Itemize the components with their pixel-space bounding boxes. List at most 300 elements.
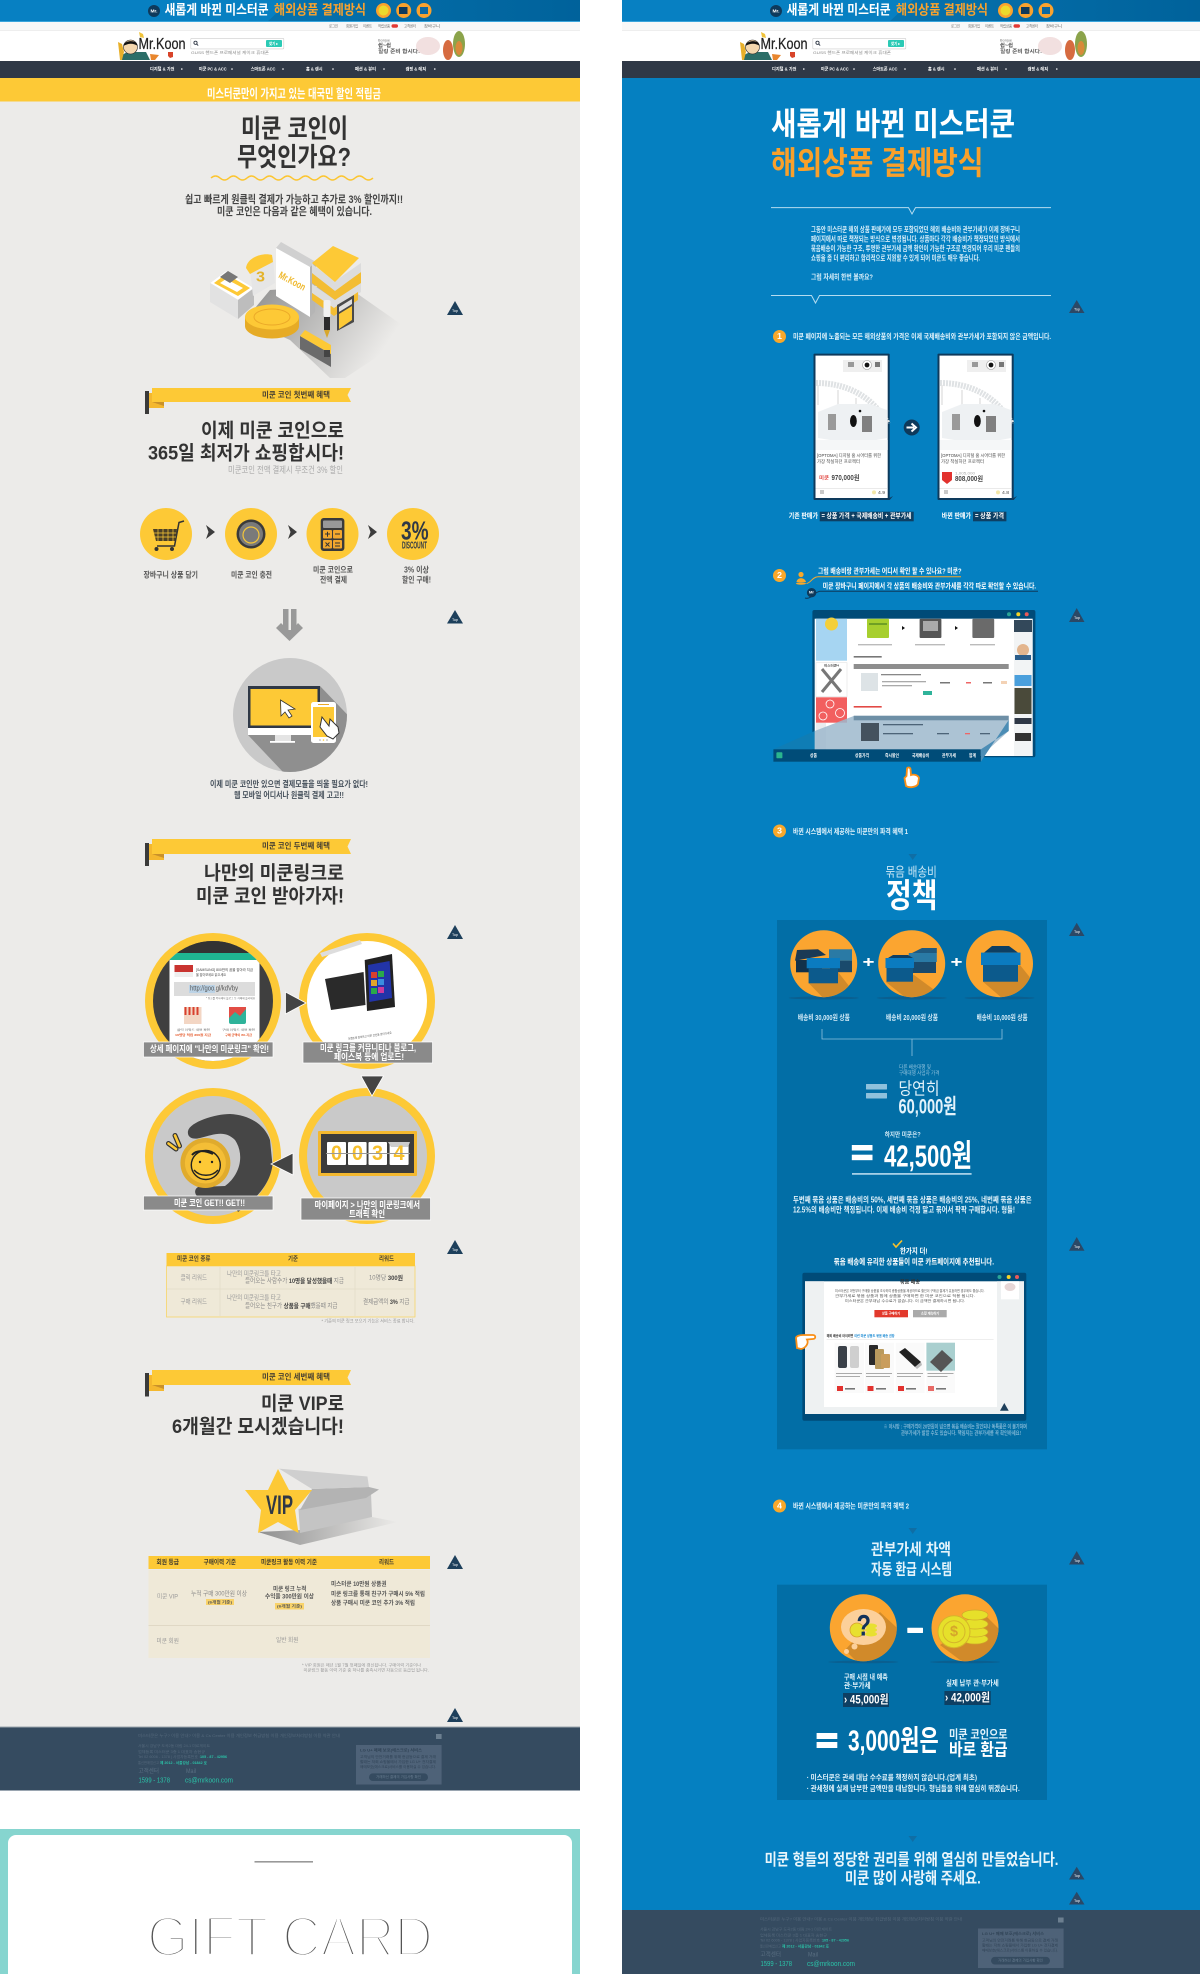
site header (left): 적립상품 xyxy=(378,22,390,28)
icon: top button xyxy=(447,610,463,624)
site header (right): 디지털 & 가전 xyxy=(772,66,796,72)
icon: top button: Top xyxy=(1074,1245,1080,1249)
comparison: other services 60,000 won: 60,000원 xyxy=(898,1096,957,1118)
site header (right): 적립상품 xyxy=(1000,22,1012,28)
icon: top button: Top xyxy=(452,309,458,313)
step 2 Q and A: 2 xyxy=(777,571,783,580)
site header (right): Bonjue xyxy=(1000,38,1012,42)
step circle: check my link: 10명당 적립 300원 지급 xyxy=(175,1033,212,1037)
step circle: check my link: 구매 리워드 내용 확인 xyxy=(222,1028,256,1032)
site header (right): GUSS 핸드폰 프로페셔널 케이크 휴대폰 xyxy=(813,49,891,55)
footer (right): 서울시 강남구 도곡2동 대림 24-1 미르게이트 xyxy=(760,1926,833,1932)
price formula labels xyxy=(789,511,1006,521)
icon: 3% discount xyxy=(387,508,439,560)
step circle: check traffic: 마이페이지 > 나만의 미쿤링크에서 xyxy=(315,1199,420,1210)
screenshot: recommended products window: 묶음 배송 xyxy=(900,1278,920,1286)
table: VIP grades: (6개월 기준) xyxy=(208,1598,233,1604)
step circle: upload to community: 미쿤 링크를 커뮤니티나 블로그, xyxy=(320,1042,416,1053)
screenshot: recommended products window xyxy=(802,1273,1026,1421)
step circle: check my link: [SAMSUNG] 800만의 꿈을 잡아라 지금 xyxy=(196,967,254,972)
closing message: 미쿤 많이 사랑해 주세요. xyxy=(845,1870,981,1888)
ribbon heading: second benefit: 미쿤 코인 두번째 혜택 xyxy=(262,840,330,850)
actual amount: › 42,000원 xyxy=(945,1690,990,1704)
ribbon heading: first benefit xyxy=(145,388,351,414)
step labels: 미쿤 코인 충전 xyxy=(231,570,272,580)
footer (right): 매매보호(에스크로)서비스를 이용하실 수 있습니다. xyxy=(982,1948,1058,1952)
site header (right): 찾기 ▸ xyxy=(891,40,901,46)
site header (right): 쉼~쉼 xyxy=(1000,42,1013,49)
price formula labels: = 상품 가격 xyxy=(975,511,1004,520)
footer (right): 할때는 저희 쇼핑몰에서 가입한 LG U+ 전자결제 xyxy=(982,1942,1058,1948)
estimated amount: 관·부가세 xyxy=(844,1680,871,1690)
table: coin rewards: 미쿤 코인 종류 xyxy=(177,1254,211,1262)
refund result: 미쿤 코인으로 xyxy=(949,1728,1008,1742)
site header (right): 고객센터 xyxy=(1026,22,1038,28)
site header (left): GUSS 핸드폰 프로페셔널 케이크 휴대폰 xyxy=(191,49,269,55)
heading: third benefit xyxy=(172,1393,344,1438)
icon: top button: Top xyxy=(452,933,458,937)
yellow banner: 미스터쿤만이 가지고 있는 대국민 할인 적립금 xyxy=(207,86,381,101)
closing message xyxy=(765,1836,1058,1888)
icon: pointing hand xyxy=(904,768,919,787)
step circle: upload to community: 페이스북 등에 업로드! xyxy=(334,1051,404,1062)
gift card title: GIFT CARD xyxy=(147,1905,433,1969)
illustration: money, book, coin, calculator, wallet: Mr.Koon xyxy=(276,270,307,293)
step circle: check traffic xyxy=(299,1088,435,1224)
footer (right): LG U+ 매매 보호(에스크로) 서비스 xyxy=(982,1931,1045,1936)
footnote xyxy=(884,1423,1027,1437)
site header (right): 미쿤 PC & ACC xyxy=(821,66,849,72)
product card: before: 970,000원 xyxy=(832,473,860,482)
icon: top button xyxy=(1069,608,1084,622)
icon: cart xyxy=(140,508,192,560)
table: coin rewards: 들어오는 친구가 상품을 구매했을때 지급 xyxy=(245,1300,338,1310)
footer (left): LG U+ 매매 보호(에스크로) 서비스 xyxy=(360,1748,423,1752)
table: VIP grades: 리워드 xyxy=(379,1557,394,1566)
step circle: upload to community: 이벤트에 참여하고 미쿤 코인을 받아가세요 xyxy=(348,1030,392,1041)
comparison: Mr.Koon 42,500 won xyxy=(852,1130,972,1175)
footer (left): 미스터쿤은 누구? 이용 안내? 이용 & Cs Center 이용 개인정보 취급방침 이용 개인정보처리방침 이용 약관 안내 xyxy=(138,1733,341,1738)
site header (right): 회원가입 xyxy=(968,22,980,28)
footer (left): Mail xyxy=(186,1769,196,1775)
step 2 Q and A: Mr xyxy=(809,591,815,595)
price formula labels: 바뀐 판매가 xyxy=(942,511,971,520)
site header (left): 쉼~쉼 xyxy=(378,42,391,49)
estimated amount xyxy=(843,1672,889,1707)
step 4 heading xyxy=(773,1500,909,1512)
icon: top button: Top xyxy=(1074,930,1080,934)
footer (right): cs@mrkoon.com xyxy=(807,1961,855,1968)
step labels: 전액 결제 xyxy=(320,574,347,584)
icon: VIP star xyxy=(245,1469,398,1545)
site header (left): 디지털 & 가전 xyxy=(150,66,174,72)
icon: 3% discount: 3% xyxy=(401,516,429,546)
comparison: other services 60,000 won: 다른 배송대행 및 xyxy=(899,1063,931,1071)
ribbon heading: second benefit xyxy=(145,839,351,866)
site header (left): 스마트폰 ACC xyxy=(251,66,276,72)
ribbon heading: first benefit: 미쿤 코인 첫번째 혜택 xyxy=(262,390,330,400)
screenshot: shopping cart window: 상품 xyxy=(810,752,817,758)
step circle: check traffic: 트래픽 확인 xyxy=(349,1208,385,1219)
table: VIP grades: 미쿤링크 활동 이력 기준 xyxy=(261,1557,317,1566)
step labels: 할인 구매! xyxy=(402,574,431,584)
footer (left): Tel 02 6006 - 1378 | 사업자등록번호 : xyxy=(138,1754,200,1759)
table: VIP grades: 수익을 300만원 이상 xyxy=(265,1592,314,1600)
icon: top button xyxy=(1069,1867,1084,1880)
icon: top button xyxy=(447,301,463,315)
icon: top button xyxy=(1069,1892,1084,1904)
notes xyxy=(807,1772,1020,1793)
footer (right): 거래하신 결제의 가입사항 확인 xyxy=(998,1958,1043,1962)
refund result: 3,000원은 xyxy=(848,1724,939,1758)
panel: bundle shipping xyxy=(777,920,1047,1449)
screenshot: shopping cart window: 합계 xyxy=(969,752,976,759)
heading: first benefit xyxy=(148,420,344,475)
symbol: plus: + xyxy=(950,954,962,971)
comparison: other services 60,000 won: 구매대행 사업자 가격 xyxy=(899,1069,940,1077)
icon: two boxes xyxy=(877,930,948,1005)
step 2 Q and A: 미쿤 장바구니 페이지에서 각 상품의 배송비와 관부가세를 각각 따로 확인할 수 있습니다. xyxy=(823,580,1036,590)
footer (right): Mail xyxy=(808,1952,818,1958)
screenshot: shopping cart window: 즉시할인 xyxy=(885,752,899,759)
table: coin rewards: 구매 리워드 xyxy=(181,1296,207,1306)
icon: top button: Top xyxy=(1074,1874,1080,1878)
step circle: check my link xyxy=(144,933,281,1069)
site header (left): 새롭게 바뀐 미스터쿤 xyxy=(165,2,269,18)
product card: before: 4.9 xyxy=(878,490,886,495)
ribbon heading: third benefit: 미쿤 코인 세번째 혜택 xyxy=(262,1372,330,1382)
refund result: 바로 환급 xyxy=(949,1740,1008,1760)
step circle: check my link: 구매 금액의 3% 지급 xyxy=(225,1033,252,1037)
step circle: check traffic: 4 xyxy=(394,1142,405,1165)
step 3 heading: 바뀐 시스템에서 제공하는 미쿤만의 파격 혜택 1 xyxy=(793,826,908,836)
site header (left): 이벤트 xyxy=(363,22,372,28)
heading: first benefit: 이제 미쿤 코인으로 xyxy=(201,420,344,442)
site header (left): 회원가입 xyxy=(346,22,358,28)
icon: top button: Top xyxy=(1074,616,1080,620)
footer (left) xyxy=(0,1726,580,1790)
step labels: 장바구니 상품 담기 xyxy=(144,570,198,580)
icon: estimated tax bubble xyxy=(828,1594,898,1664)
step labels: 미쿤 코인으로 xyxy=(313,564,354,574)
title: what is mirror coin: 미쿤 코인이 xyxy=(241,114,348,144)
intro text: 쉽고 빠르게 원클릭 결제가 가능하고 추가로 3% 할인까지!! xyxy=(185,192,403,206)
site header (right): Mr.Koon xyxy=(760,36,808,53)
screenshot: recommended products window: 관부가세로 묶음 상품과 함께 상품을 구매하면 한 미쿤 코인으로 적용 됩니다. xyxy=(835,1293,975,1298)
table: coin rewards: 나만의 미쿤링크를 타고 xyxy=(227,1292,281,1302)
box captions: 배송비 10,000원 상품 xyxy=(977,1012,1028,1022)
site header (left): 해외상품 결제방식 xyxy=(274,2,366,18)
product card: after xyxy=(938,354,1017,500)
icon: 3% discount: DISCOUNT xyxy=(402,540,427,552)
step 1 heading xyxy=(773,330,1051,343)
site header (left): 로그인 xyxy=(329,22,338,28)
table: VIP grades: 누적 구매 300만원 이상 xyxy=(191,1588,247,1598)
notes: · 미스터쿤은 관세 대납 수수료를 책정하지 않습니다.(업계 최초) xyxy=(807,1772,977,1782)
site header (left): 힐링 준비 합시다! xyxy=(378,48,420,55)
intro text: 미쿤 코인은 다음과 같은 혜택이 있습니다. xyxy=(217,204,372,218)
screenshot: recommended products window: 쇼핑 계속하기 xyxy=(921,1311,939,1316)
site header (right): 힐링 준비 합시다! xyxy=(1000,48,1042,55)
footnote: ※ 아시방 : 구매가격이 20만원이 넘으면 묶음 배송비는 할인되나 독특품은 이 불가하며 xyxy=(884,1423,1027,1431)
icon: top button xyxy=(447,1555,463,1569)
caption: no payment module: 웹 모바일 어디서나 원클릭 결제 고고!! xyxy=(234,790,344,800)
step circle: check traffic: 0 xyxy=(331,1142,342,1165)
heading: second benefit xyxy=(196,862,344,908)
screenshot: recommended products window: 미스터쿤은 이번부터 구매할 상품을 조사하여 종합상품을 제공하므로 할인이 구매금 결제가 유효하면 경우에도 좋습니다. xyxy=(835,1288,984,1293)
icon: top button: Top xyxy=(452,1563,458,1567)
site header (left): 홈 & 렌시 xyxy=(306,66,323,72)
screenshot: shopping cart window: 미스터쿤4 xyxy=(824,662,839,668)
site header (right): 스마트폰 ACC xyxy=(873,66,898,72)
product card: after: 1,005,000 xyxy=(955,472,975,476)
main title: 해외상품 결제방식 xyxy=(771,145,984,181)
panel background xyxy=(0,78,580,1728)
icon: top button: Top xyxy=(1074,1559,1080,1563)
footer (right): 업체등록 미스터쿤 3층 1 대표자 송현규 xyxy=(760,1932,828,1938)
table: VIP grades: 미스터쿤 10만원 상품권 xyxy=(331,1580,387,1588)
heading: third benefit: 6개월간 모시겠습니다! xyxy=(172,1416,344,1438)
step circle: get coin xyxy=(144,1088,281,1224)
intro block with dividers: 그럼 자세히 한번 볼까요? xyxy=(811,272,873,282)
icon: monitor and phone in circle xyxy=(233,658,347,772)
table: VIP grades: 미쿤 링크를 통해 친구가 구매시 5% 적립 xyxy=(331,1590,425,1598)
step circle: check my link: 상세 페이지에 "나만의 미쿤링크" 확인! xyxy=(150,1043,269,1054)
site header (right): 해외상품 결제방식 xyxy=(896,2,988,18)
table: VIP grades: 미쿤링크 활동 이력 기준 중 하나를 충족시키면 자동으로 등급업 됩니다. xyxy=(304,1666,429,1674)
footer (left): 업체등록 미스터쿤 3층 1 대표자 송현규 xyxy=(138,1749,206,1754)
step circle: get coin: 미쿤 코인 GET!! GET!! xyxy=(174,1198,245,1208)
icon: top button xyxy=(447,1240,463,1254)
caption: no payment module: 이제 미쿤 코인만 있으면 결제모듈을 띄울 필요가 없다! xyxy=(210,779,368,789)
symbol: plus: + xyxy=(862,954,874,971)
yellow banner xyxy=(0,78,580,102)
site header (right): 패션 & 뷰티 xyxy=(977,66,998,72)
table: VIP grades: 미쿤 VIP xyxy=(157,1592,178,1600)
heading: bundle shipping policy: 묶음 배송비 xyxy=(886,864,937,880)
step circle: upload to community: http://goo.gl/kAdc25 xyxy=(352,1043,393,1053)
icon: VIP star: VIP xyxy=(266,1490,293,1520)
comparison: Mr.Koon 42,500 won: 42,500원 xyxy=(884,1138,972,1174)
price formula labels: 기존 판매가 xyxy=(789,511,818,520)
step 3 heading xyxy=(773,824,908,838)
step 1 heading: 1 xyxy=(777,332,783,341)
site header (right): 새롭게 바뀐 미스터쿤 xyxy=(787,2,891,18)
heading: bundle shipping policy: 정책 xyxy=(886,877,938,914)
product card: after: 808,000원 xyxy=(955,474,983,483)
icon: top button xyxy=(1069,1551,1084,1564)
table: VIP grades: 상품 구매시 미쿤 코인 추가 3% 적립 xyxy=(331,1599,415,1607)
heading: tax refund system xyxy=(871,1528,952,1578)
icon: top button xyxy=(1069,923,1084,936)
product card: after: 가장 착실하던 프로젝터 xyxy=(941,458,984,465)
icon: coins xyxy=(930,1594,1000,1664)
product card: before: [OPTOMA] 디지털 홈 시어터를 위한 xyxy=(817,452,881,459)
footer (left): 제 2012 - 서울강남 - 01842 호 xyxy=(160,1760,208,1765)
footer (right) xyxy=(622,1910,1200,1974)
symbol: minus xyxy=(907,1628,923,1633)
step circle: check my link: http://goo.gl/kdVby xyxy=(190,986,238,992)
title: what is mirror coin: 무엇인가요? xyxy=(237,142,351,172)
site header (right): 캠핑 & 레져 xyxy=(1028,66,1048,72)
explanation text xyxy=(793,1194,1032,1214)
step 4 heading: 4 xyxy=(777,1502,783,1510)
intro block with dividers: 묶음배송이 가능한 구조, 투명한 관부가세 금액 확인이 가능한 구조로 변경되어 우리 미쿤 팬들의 xyxy=(811,243,1020,253)
footer (right): Tel 02 6006 - 1378 | 사업자등록번호 : xyxy=(760,1938,822,1942)
table: coin rewards: 들어오는 사람수가 10명을 달성했을때 지급 xyxy=(245,1276,344,1284)
footer (left): 서울시 강남구 도곡2동 대림 24-1 미르게이트 xyxy=(138,1743,211,1748)
icon: top button: Top xyxy=(1074,1899,1080,1903)
table: coin rewards: * 기준의 미쿤 링크 모으기 기능은 서비스 종료 합니다. xyxy=(322,1318,414,1324)
icon: top button: Top xyxy=(1074,308,1080,312)
icon: top button: Top xyxy=(452,1716,458,1720)
icon: coins: $ xyxy=(950,1623,959,1640)
footnote: 관부가세가 발할 수도 있습니다. 책임지는 관부가세를 꼭 확인하세요! xyxy=(901,1429,1021,1437)
table: coin rewards: 결제금액의 3% 지급 xyxy=(363,1296,410,1306)
footer (left): 통신판매업신고 xyxy=(138,1760,160,1765)
one more thing heading: 한가지 더! xyxy=(900,1246,928,1256)
table: coin rewards: 10명당 300원 xyxy=(369,1272,403,1282)
screenshot: recommended products window: 상품 구매하기 xyxy=(882,1311,900,1316)
screenshot: recommended products window: 미스터쿤은 관부대납 수수료가 없습니다. 이 금액만 결제하시면 됩니다. xyxy=(845,1298,965,1303)
step 2 Q and A: 그럼 배송비랑 관부가세는 어디서 확인 할 수 있나요? 미쿤? xyxy=(818,566,962,576)
icon: top button xyxy=(447,1708,463,1722)
site header (left): Bonjue xyxy=(378,38,390,42)
table: VIP grades: 구매이력 기준 xyxy=(204,1557,236,1566)
panel: mirror coin page (left) xyxy=(0,0,580,1790)
arrow: double down xyxy=(276,609,303,641)
closing message: 미쿤 형들의 정당한 권리를 위해 열심히 만들었습니다. xyxy=(765,1851,1058,1869)
table: VIP grades xyxy=(148,1556,430,1674)
site header (right): 장바구니 xyxy=(1046,22,1062,28)
explanation text: 두번째 묶음 상품은 배송비의 50%, 세번째 묶음 상품은 배송비의 25%, 네번째 묶음 상품은 xyxy=(793,1194,1032,1204)
box captions xyxy=(798,1012,1028,1022)
table: coin rewards: 리워드 xyxy=(379,1254,394,1262)
footer (right): 고객센터 xyxy=(760,1950,781,1958)
site header (right) xyxy=(622,0,1200,78)
product card: before xyxy=(814,354,893,500)
main title: 새롭게 바뀐 미스터쿤 xyxy=(771,106,1015,142)
footer (left): 1599 - 1378 xyxy=(138,1778,170,1784)
site header (left): 장바구니 xyxy=(424,22,440,28)
product card: before: 미쿤 xyxy=(819,475,829,482)
screenshot: shopping cart window: 상품가격 xyxy=(855,752,869,759)
footer (left): 할때는 저희 쇼핑몰에서 가입한 LG U+ 전자결제 xyxy=(360,1759,436,1764)
intro text xyxy=(185,192,403,218)
site header (left): Mr. xyxy=(150,8,158,14)
site header (left): 고객센터 xyxy=(404,22,416,28)
icon: top button: Top xyxy=(452,1248,458,1252)
title: what is mirror coin xyxy=(211,114,373,180)
site header (left): 찾기 ▸ xyxy=(269,40,279,46)
step labels: 3% 이상 xyxy=(404,564,430,574)
footer (right): 통신판매업신고 xyxy=(760,1944,782,1948)
one more thing heading xyxy=(834,1240,994,1266)
screenshot: shopping cart window: 관부가세 xyxy=(942,752,956,759)
table: VIP grades: 회원 등급 xyxy=(156,1557,179,1566)
product card: after: 4.8 xyxy=(1002,490,1010,495)
step circle: check traffic: 3 xyxy=(372,1142,383,1165)
table: VIP grades: * VIP 회원은 매년 1월 7월 첫째일에 갱신됩니다. 구매이력 기준이나 xyxy=(302,1662,421,1668)
explanation text: 12.5%의 배송비만 책정됩니다. 이제 배송비 걱정 말고 묶어서 팍팍 구매합시다. 형들! xyxy=(793,1204,1015,1214)
table: VIP grades: 미쿤 회원 xyxy=(156,1637,179,1645)
heading: second benefit: 미쿤 코인 받아가자! xyxy=(196,886,344,908)
price formula labels: = 상품 가격 + 국제배송비 + 관부가세 xyxy=(822,511,912,520)
icon: pointing hand (side) xyxy=(796,1335,815,1349)
comparison: Mr.Koon 42,500 won: 하지만 미쿤은? xyxy=(885,1130,921,1138)
heading: first benefit: 365일 최저가 쇼핑합시다! xyxy=(148,442,344,464)
intro block with dividers: 페이지에서 따로 책정되는 방식으로 변경됩니다. 상품마다 각각 배송비가 책정되었던 방식에서 xyxy=(811,234,1020,244)
step 4 heading: 바뀐 시스템에서 제공하는 미쿤만의 파격 혜택 2 xyxy=(793,1500,909,1510)
step circle: check my link: 클릭 리워드 내용 확인 xyxy=(177,1028,211,1032)
panel: tax refund xyxy=(777,1585,1047,1800)
site header (left): 미쿤 PC & ACC xyxy=(199,66,227,72)
actual amount: 실제 납부 관·부가세 xyxy=(946,1678,999,1688)
step 3 heading: 3 xyxy=(777,826,783,836)
step circle: check my link: * 링크를 복사해서 블로그 등 카페에 올리세요 xyxy=(206,996,256,1000)
icon: one box xyxy=(964,930,1034,1000)
footer (left): 거래하신 결제의 가입사항 확인 xyxy=(376,1774,421,1779)
panel background xyxy=(622,0,1200,1911)
step 2 Q and A xyxy=(773,566,1038,598)
heading: second benefit: 나만의 미쿤링크로 xyxy=(204,862,344,884)
one more thing heading: 묶음 배송에 유리한 상품들이 미쿤 카트페이지에 추천됩니다. xyxy=(834,1256,994,1266)
actual amount xyxy=(944,1678,999,1705)
table: coin rewards: 나만의 미쿤링크를 타고 xyxy=(227,1268,281,1278)
arrow: before to after xyxy=(904,420,920,436)
screenshot: shopping cart window: 국제배송비 xyxy=(912,752,929,759)
step circle: check my link: 을 잡아보세요 읽으세요 xyxy=(196,972,227,977)
estimated amount: › 45,000원 xyxy=(844,1692,888,1706)
table: coin rewards: 클릭 리워드 xyxy=(181,1272,207,1282)
site header (right): 홈 & 렌시 xyxy=(928,66,945,72)
footer (right): 1599 - 1378 xyxy=(760,1961,792,1968)
table: coin rewards: 기준 xyxy=(288,1254,298,1262)
illustration: money, book, coin, calculator, wallet: 3 xyxy=(256,268,265,286)
arrows between steps xyxy=(206,525,377,539)
icon: top button xyxy=(1069,1237,1084,1251)
comparison: other services 60,000 won xyxy=(866,1063,957,1118)
site header (right): 이벤트 xyxy=(985,22,994,28)
site header (right): Mr. xyxy=(772,8,780,14)
footer (right): 105 - 87 - 42956 xyxy=(822,1938,849,1942)
estimated amount: 구매 시점 내 예측 xyxy=(844,1672,888,1682)
icon: estimated tax bubble: ? xyxy=(856,1610,871,1642)
main title xyxy=(771,106,1015,181)
heading: third benefit: 미쿤 VIP로 xyxy=(261,1393,344,1415)
step labels xyxy=(144,564,431,584)
site header (right): 로그인 xyxy=(951,22,960,28)
footer (right): 미스터쿤은 누구? 이용 안내? 이용 & Cs Center 이용 개인정보 취급방침 이용 개인정보처리방침 이용 약관 안내 xyxy=(760,1916,963,1922)
product card: after: [OPTOMA] 디지털 홈 시어터를 위한 xyxy=(941,452,1005,459)
heading: tax refund system: 자동 환급 시스템 xyxy=(871,1560,952,1578)
screenshot: recommended products window: 해외 배송비 아끼려면 이런 미쿤 상품도 묶음 배송 권장 xyxy=(827,1333,895,1338)
panel: gift card xyxy=(0,1829,580,1974)
site header (left): 캠핑 & 레져 xyxy=(406,66,426,72)
site header (left): 패션 & 뷰티 xyxy=(355,66,376,72)
arrows between step circles xyxy=(271,992,384,1175)
icon: calculator xyxy=(306,508,358,560)
box captions: 배송비 30,000원 상품 xyxy=(798,1012,850,1022)
process: four step icons xyxy=(140,508,439,584)
screenshot: shopping cart window xyxy=(773,610,1035,762)
step circle: upload to community xyxy=(299,933,435,1069)
site header (left): Mr.Koon xyxy=(138,36,186,53)
footer (left): 매매보호(에스크로)서비스를 이용하실 수 있습니다. xyxy=(360,1764,436,1769)
intro block with dividers: 쇼핑을 좀 더 편리하고 합리적으로 지원할 수 있게 되어 미쿤도 매우 좋습니다. xyxy=(811,252,980,262)
footer (left): cs@mrkoon.com xyxy=(185,1778,233,1784)
table: coin rewards xyxy=(166,1253,415,1324)
